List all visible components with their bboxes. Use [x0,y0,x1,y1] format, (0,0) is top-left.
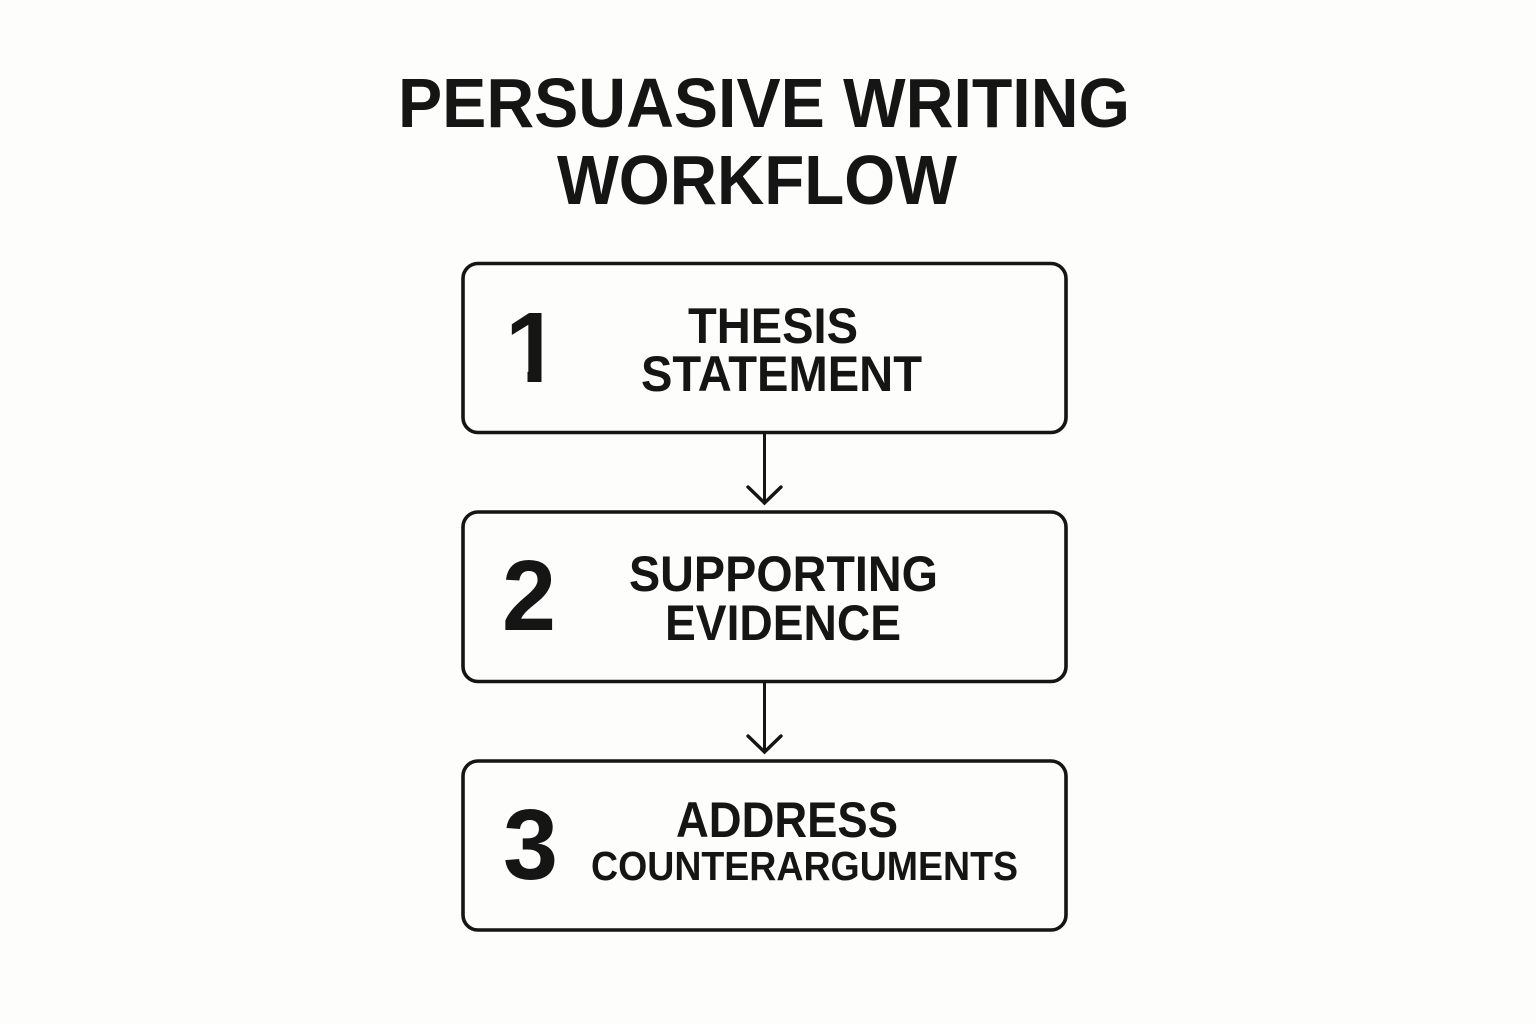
step label: thesis statement [641,298,922,402]
arrow: step 2 to step 3 [748,682,781,752]
step label: thesis statement: STATEMENT [641,346,922,402]
step label: supporting evidence [629,546,938,651]
title: PERSUASIVE WRITING [398,64,1130,142]
step label: supporting evidence: SUPPORTING [629,546,938,602]
title [398,64,1130,219]
step label: supporting evidence: EVIDENCE [665,595,901,651]
step label: address counterarguments [591,792,1018,889]
step number 1: 1 [505,292,561,404]
panel: step 1 thesis statement [463,264,1066,432]
arrow: step 1 to step 2 [748,433,781,503]
step number 3: 3 [503,789,558,901]
step number 2: 2 [502,540,556,652]
title: WORKFLOW [557,141,957,219]
step label: address counterarguments: ADDRESS [676,792,898,848]
step label: thesis statement: THESIS [688,298,858,354]
panel: step 3 address counterarguments [463,761,1066,930]
step label: address counterarguments: COUNTERARGUMENTS [591,843,1018,889]
panel: step 2 supporting evidence [463,512,1066,682]
infographic canvas [402,78,1126,932]
